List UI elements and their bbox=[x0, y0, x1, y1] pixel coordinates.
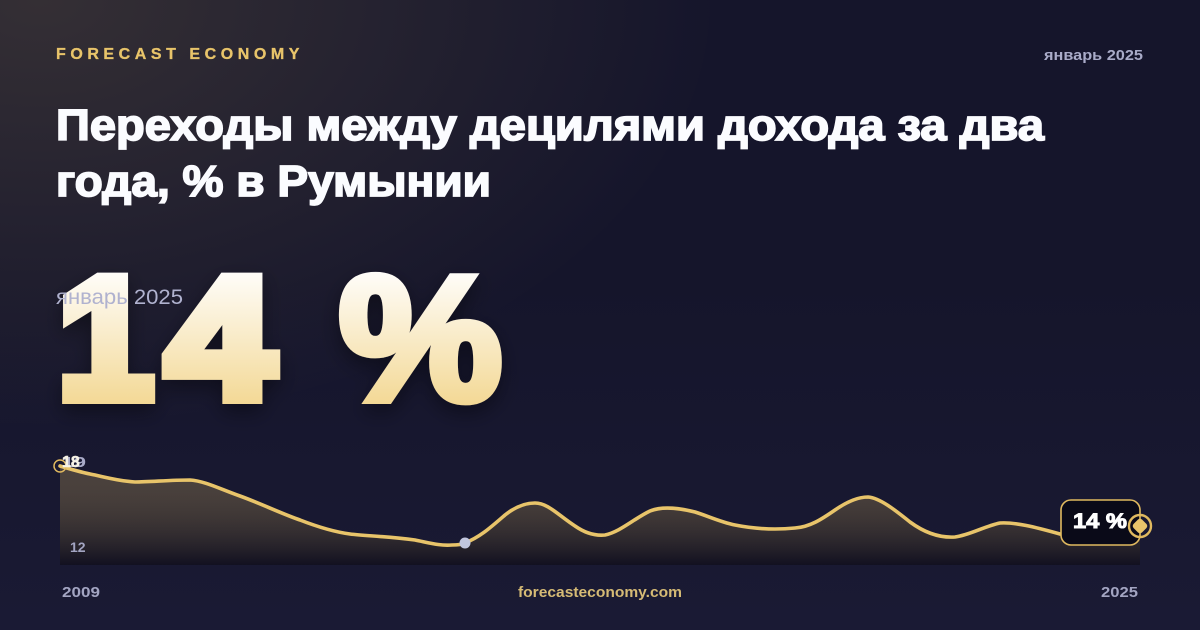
current value callout bbox=[1061, 500, 1140, 545]
title bbox=[56, 101, 1045, 206]
start value label: 18 bbox=[62, 454, 80, 471]
x axis start: 2009 bbox=[62, 584, 100, 601]
title: Переходы между децилями дохода за два bbox=[56, 101, 1045, 150]
chart: area bbox=[60, 466, 1140, 565]
source: forecasteconomy.com bbox=[518, 584, 682, 601]
x axis end: 2025 bbox=[1101, 584, 1138, 601]
date top right: январь 2025 bbox=[1044, 47, 1143, 64]
date overlay: январь 2025 bbox=[56, 286, 183, 309]
title: года, % в Румынии bbox=[56, 157, 491, 206]
axis max label: 19 bbox=[62, 454, 86, 471]
start marker bbox=[54, 460, 66, 472]
big value: 4 bbox=[166, 242, 274, 434]
minimum marker bbox=[460, 538, 470, 548]
big value: % bbox=[339, 240, 502, 438]
big value bbox=[58, 240, 502, 438]
current value callout: 14 % bbox=[1073, 510, 1127, 533]
chart: line bbox=[60, 466, 1060, 545]
big value: 1 bbox=[58, 242, 153, 434]
axis min label: 12 bbox=[70, 539, 86, 555]
brand label: FORECAST ECONOMY bbox=[56, 46, 304, 63]
end marker bbox=[1129, 515, 1151, 537]
